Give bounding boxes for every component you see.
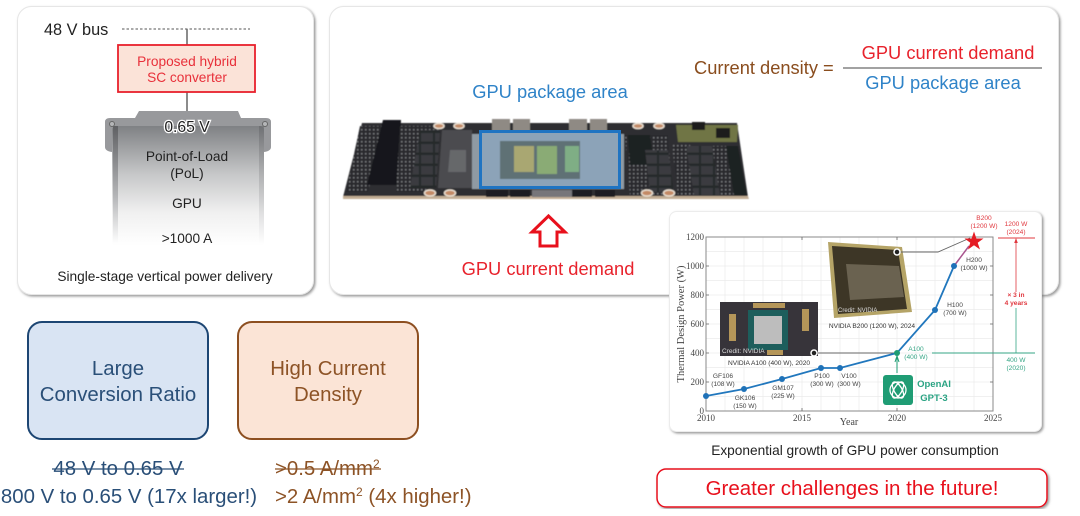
image: NVIDIA B200: [828, 242, 912, 318]
axis labels: 800: [690, 290, 704, 300]
axis labels: 2010: [697, 413, 716, 423]
formula: current density: Current density =: [694, 57, 834, 78]
axis labels: 1000: [686, 261, 704, 271]
axis labels: 2020: [888, 413, 906, 423]
data labels: (300 W): [837, 381, 861, 388]
data labels: H200: [966, 257, 982, 264]
text: current density figures: >2 A/mm: [275, 486, 356, 508]
GPU module: (PoL): [170, 166, 204, 181]
image: NVIDIA A100: [720, 302, 818, 356]
callout: large conversion ratio: Conversion Ratio: [40, 384, 196, 406]
panel: GPU power chart: [670, 212, 1042, 432]
caption: Single-stage vertical power delivery: [57, 269, 273, 284]
data labels: (108 W): [711, 381, 735, 388]
data labels: [711, 257, 988, 410]
panel: single-stage vertical power delivery: [18, 6, 314, 294]
B200 label: [970, 215, 998, 230]
B200 label: (1200 W): [970, 223, 998, 230]
GPU module: GPU: [172, 196, 202, 211]
data labels: V100: [841, 373, 857, 380]
data labels: GF106: [713, 373, 733, 380]
GPU module: 0.65 V: [164, 119, 210, 136]
icon: OpenAI logo: [883, 375, 913, 405]
image captions: NVIDIA B200 (1200 W), 2024: [829, 323, 915, 330]
label: OpenAI GPT-3: OpenAI: [917, 379, 951, 390]
data labels: (150 W): [733, 403, 757, 410]
label: 48 V bus: 48 V bus: [44, 21, 108, 39]
axis labels: 400: [690, 348, 704, 358]
text: current density figures: >0.5 A/mm: [275, 458, 373, 480]
GPU module: Point-of-Load: [146, 149, 228, 164]
formula: current density: GPU package area: [865, 72, 1022, 93]
connectors from bus through converter to GPU: [186, 29, 188, 112]
annotation: 1200 W vs 400 W: 4 years: [1005, 300, 1028, 307]
text: conversion ratio figures: [1, 458, 257, 508]
axis labels: [676, 232, 1002, 428]
blue package outline: [480, 132, 620, 188]
data labels: H100: [947, 302, 963, 309]
power trend line: [703, 246, 969, 399]
callout: high current density: Density: [294, 384, 363, 406]
image: NVIDIA B200: Credit: NVIDIA: [838, 308, 877, 314]
axis labels: 2015: [793, 413, 812, 423]
data labels: (700 W): [943, 310, 967, 317]
axis labels: 200: [690, 377, 704, 387]
text: current density figures: 2: [373, 457, 380, 471]
plot grid and axes: [706, 237, 993, 411]
arrow: GPT-3 to A100: [895, 356, 899, 373]
label: OpenAI GPT-3: [917, 379, 951, 404]
image captions: [728, 323, 915, 367]
annotation: 1200 W vs 400 W: (2020): [1006, 365, 1026, 372]
callout: greater challenges: Greater challenges in the future!: [706, 477, 998, 500]
label: GPU package area: GPU package area: [472, 81, 629, 102]
image: NVIDIA A100: Credit: NVIDIA: [722, 348, 765, 355]
callout: large conversion ratio: [28, 322, 208, 439]
axis labels: 2025: [984, 413, 1002, 423]
icon: red star B200: [964, 232, 984, 250]
annotation: 1200 W vs 400 W: 400 W: [1006, 357, 1026, 364]
leader lines from images to data points: [814, 238, 970, 353]
annotation: 1200 W vs 400 W: × 3 in: [1007, 292, 1025, 299]
axis labels: 0: [700, 406, 704, 416]
GPU board photo: [343, 119, 749, 199]
axis labels: Year: [840, 417, 859, 428]
data labels: GK106: [735, 395, 756, 402]
data labels: GM107: [772, 385, 794, 392]
callout: high current density: [238, 322, 418, 439]
A100 label: [904, 346, 928, 361]
GPU module: >1000 A: [162, 231, 213, 246]
converter box: SC converter: [147, 70, 227, 85]
A100 label: (400 W): [904, 354, 928, 361]
text: current density figures: [275, 457, 472, 508]
callout: greater challenges: [657, 469, 1047, 507]
text: current density figures: (4x higher!): [363, 486, 472, 508]
chart caption: Exponential growth of GPU power consumption: [711, 443, 999, 458]
axis labels: 1200: [686, 232, 704, 242]
axis labels: 600: [690, 319, 704, 329]
converter box: [118, 45, 255, 92]
data labels: P100: [814, 373, 830, 380]
formula: current density: [694, 42, 1042, 93]
data labels: (1000 W): [960, 265, 988, 272]
annotation: 1200 W vs 400 W: (2024): [1006, 229, 1026, 236]
text: current density figures: 2: [356, 485, 363, 499]
axis labels: Thermal Design Power (W): [676, 265, 687, 382]
annotation: 1200 W vs 400 W: 1200 W: [1005, 221, 1028, 228]
A100 label: A100: [908, 346, 924, 353]
data labels: (225 W): [771, 393, 795, 400]
formula: current density: GPU current demand: [862, 42, 1034, 63]
label: OpenAI GPT-3: GPT-3: [920, 393, 948, 404]
dashed 48 V bus line: [122, 28, 250, 30]
B200 label: B200: [976, 215, 992, 222]
callout: large conversion ratio: Large: [92, 358, 144, 380]
label: GPU current demand: GPU current demand: [462, 258, 634, 279]
text: conversion ratio figures: 48 V to 0.65 V: [53, 458, 183, 480]
panel: GPU board and current density: [330, 6, 1058, 294]
data labels: (300 W): [810, 381, 834, 388]
image captions: NVIDIA A100 (400 W), 2020: [728, 360, 810, 367]
converter box: Proposed hybrid: [137, 54, 237, 69]
up arrow: [532, 216, 565, 246]
GPU module: [105, 111, 271, 246]
callout: high current density: High Current: [270, 358, 386, 380]
text: conversion ratio figures: 800 V to 0.65 V (17x larger!): [1, 486, 257, 508]
annotation: 1200 W vs 400 W: [932, 221, 1035, 372]
